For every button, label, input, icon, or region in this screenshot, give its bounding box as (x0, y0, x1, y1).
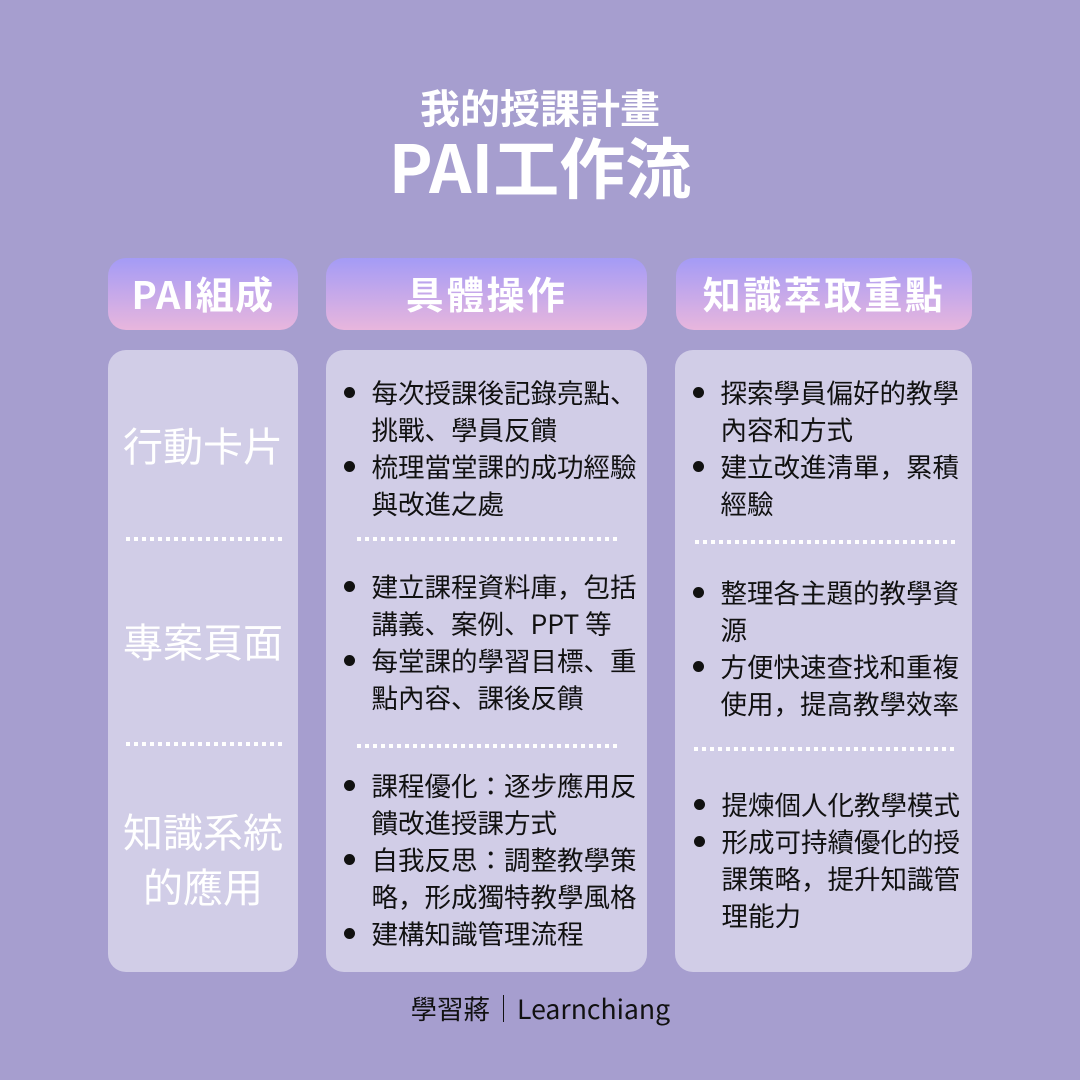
list: 專案頁面 operations: 建立課程資料庫，包括 講義、案例、PPT 等 (372, 566, 636, 642)
footer credit: Learnchiang (517, 988, 670, 1027)
label: 知識系統的應用 (123, 800, 283, 914)
heading: 知識萃取重點: 知識萃取重點 (703, 265, 945, 320)
list item: 梳理: 梳理當堂課的成功經驗 與改進之處 (372, 446, 636, 522)
list item: 每堂課: 每堂課的學習目標、重 點內容、課後反饋 (372, 640, 636, 716)
footer credit: 學習蔣 (410, 988, 490, 1027)
title: 我的授課計畫 (420, 77, 660, 135)
panel: operations (326, 350, 647, 972)
heading: PAI組成 (108, 258, 298, 330)
label: 知識系統的應用: 的應用 (143, 856, 263, 914)
list item: 形成: 形成可持續優化的授 課策略，提升知識管 理能力 (722, 820, 960, 934)
list item: 自我反思: 自我反思：調整教學策 略，形成獨特教學風格 (372, 838, 636, 914)
list: 行動卡片 operations: 每次授課後記錄亮點、 挑戰、學員反饋 (372, 372, 636, 448)
list: 提煉: 提煉個人化教學模式 (722, 784, 960, 822)
heading: 具體操作 (326, 258, 647, 330)
label: 知識系統的應用: 知識系統 (123, 800, 283, 858)
list: 課程優化: 課程優化：逐步應用反 饋改進授課方式 (372, 764, 636, 840)
footer credit (410, 988, 670, 1027)
label: 行動卡片: 行動卡片 (123, 415, 283, 473)
heading: 知識萃取重點 (676, 258, 972, 330)
panel: PAI components (108, 350, 298, 972)
list: 整理: 整理各主題的教學資 源 (720, 572, 959, 648)
panel: key points (675, 350, 972, 972)
heading: 具體操作: 具體操作 (406, 265, 567, 320)
list item: 建構: 建構知識管理流程 (372, 912, 584, 952)
label: 專案頁面: 專案頁面 (123, 611, 283, 669)
list item: 方便: 方便快速查找和重複 使用，提高教學效率 (720, 646, 959, 722)
list item: 建立改進清單: 建立改進清單，累積 經驗 (720, 446, 959, 522)
heading: PAI組成: PAI組成 (131, 265, 275, 320)
list: 探索: 探索學員偏好的教學 內容和方式 (720, 372, 959, 448)
title: PAI工作流 (389, 117, 691, 213)
